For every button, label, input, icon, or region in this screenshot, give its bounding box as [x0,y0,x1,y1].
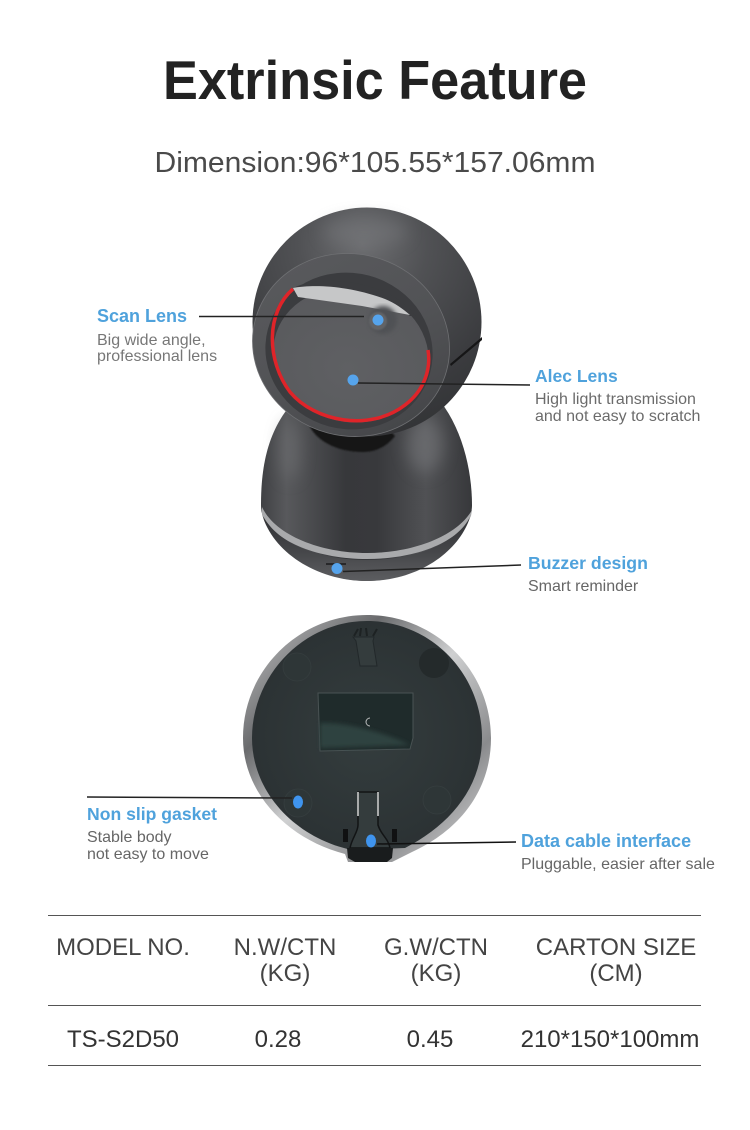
description: High light transmission [535,391,696,408]
heading: Non slip gasket [87,804,217,824]
subtitle: dimensions: Dimension:96*105.55*157.06mm [154,147,596,179]
table header: CARTON SIZE [536,934,696,961]
description: not easy to move [87,846,209,863]
foot pads [283,653,311,681]
table row: TS-S2D50 [67,1026,179,1053]
table header [56,934,696,987]
white reflection wedge [293,286,410,315]
callout: non slip gasket [87,796,303,863]
scan lens camera [369,306,397,334]
metal rim [243,615,491,862]
heading: Data cable interface [521,831,691,851]
table header: MODEL NO. [56,934,190,961]
scanner base [261,395,472,581]
description: and not easy to scratch [535,408,700,425]
callout: scan lens [97,306,384,365]
dark lens top shade [293,281,416,316]
lens glass [261,273,441,437]
marker dot [372,314,384,326]
leader line [199,316,364,318]
callout: alec lens [348,366,700,425]
marker dot [332,563,342,574]
description: Big wide angle, [97,332,206,349]
description: Stable body [87,829,172,846]
scanner underside view [243,615,491,862]
callout: data cable interface [366,831,715,873]
table header: (KG) [411,960,461,987]
scanner front view [232,208,482,581]
leader line [87,797,292,798]
heading: Buzzer design [528,553,648,573]
red LED ring [272,289,429,421]
rectangular recess [318,693,413,751]
table row: 210*150*100mm [521,1026,699,1053]
table row: 0.28 [255,1026,301,1053]
inner dark ring [248,254,450,448]
callout: buzzer design [332,553,648,595]
marker dot [348,374,358,386]
heading: Scan Lens [97,306,187,326]
table header: N.W/CTN [234,934,336,961]
cable slot [343,792,397,862]
leader line [358,383,530,385]
table row: 0.45 [407,1026,453,1053]
description: Pluggable, easier after sale [521,856,715,873]
arrow mark [353,628,377,666]
scanner ball head [232,208,482,459]
dark underside [252,621,482,850]
table row [67,1026,699,1053]
marker dot [366,834,376,848]
leader line [343,565,521,572]
description: Smart reminder [528,578,639,595]
table header: G.W/CTN [384,934,488,961]
table header: (CM) [589,960,643,987]
description: professional lens [97,348,217,365]
outer bezel [232,231,470,459]
table header: (KG) [260,960,310,987]
specification table [48,916,701,1066]
heading: Alec Lens [535,366,618,386]
marker dot [293,796,303,808]
leader line [377,842,516,844]
title: Extrinsic Feature [163,49,587,111]
